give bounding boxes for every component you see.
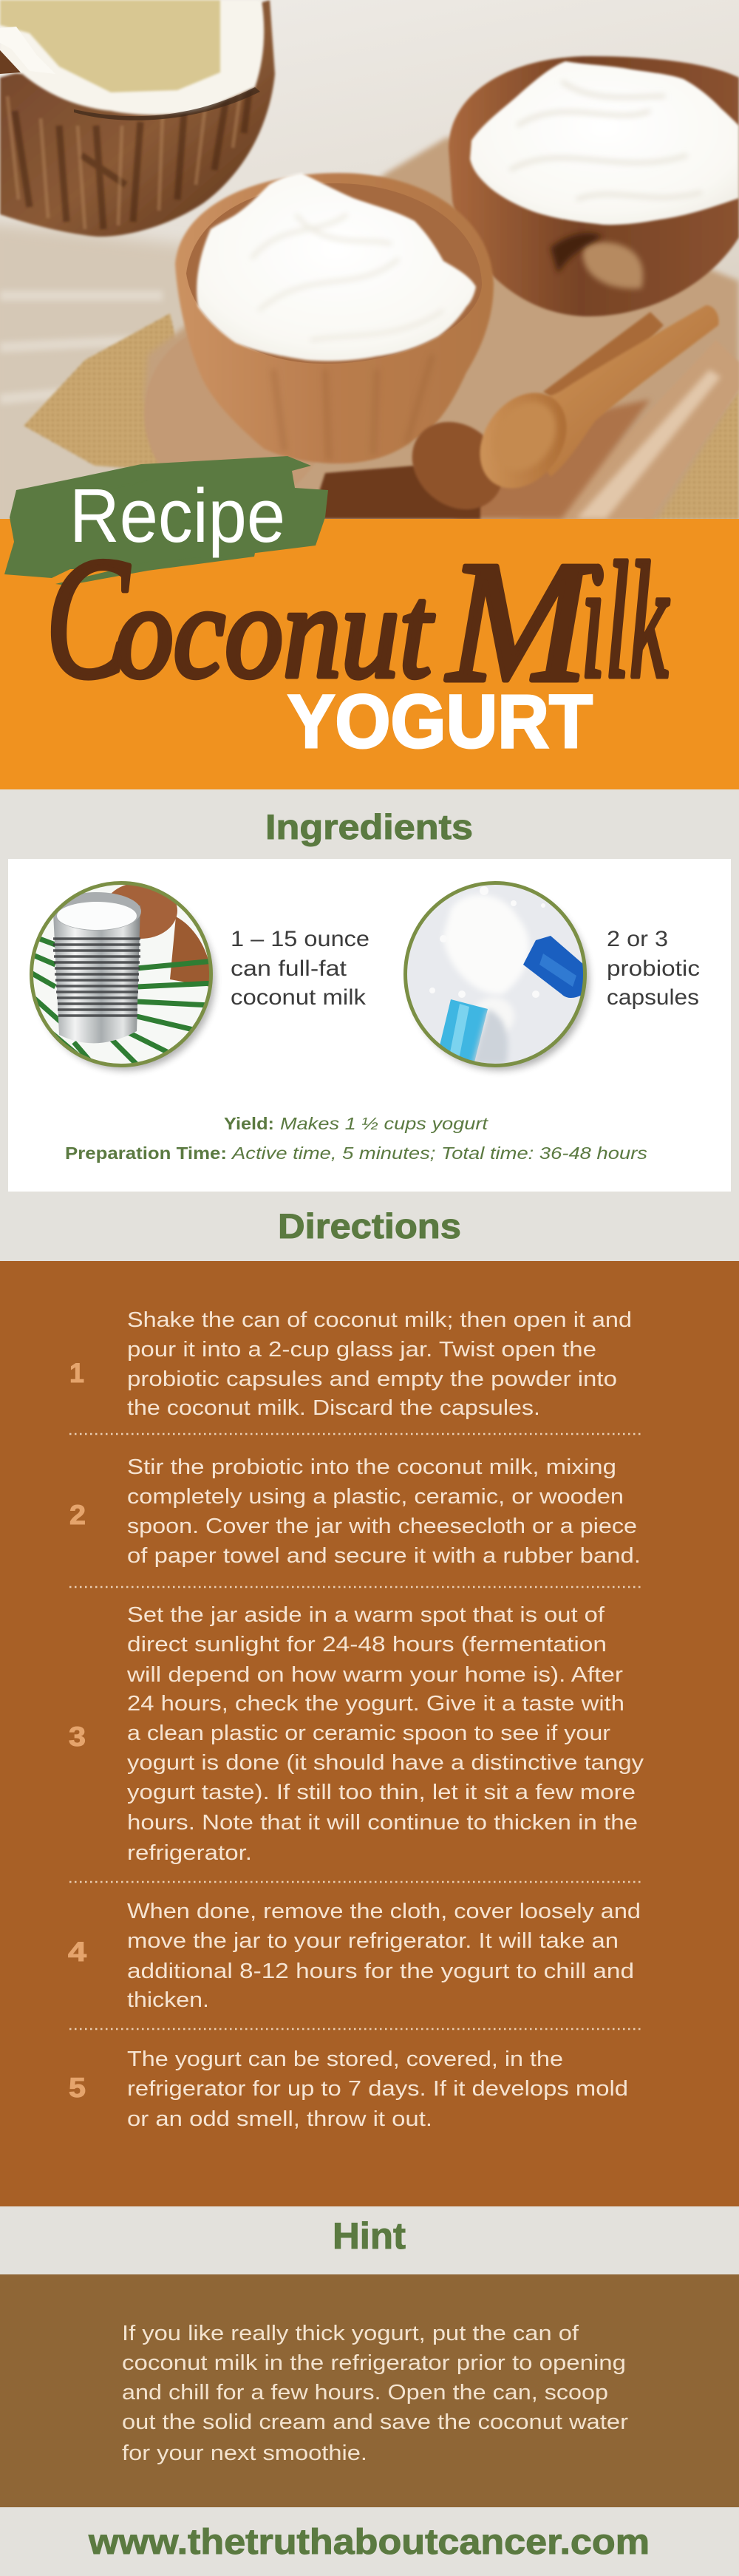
burlap left (24, 313, 176, 469)
wooden tray (144, 137, 739, 519)
icon: coconut milk can photo (30, 880, 215, 1072)
text: hint body: and chill for a few hours. Open the can, scoop (122, 2381, 608, 2405)
text: probiotic ingredient: 2 or 3 (607, 927, 668, 951)
step 2 (69, 1455, 641, 1568)
green brush stroke (4, 456, 328, 585)
title: Coconut Milk: C (46, 522, 130, 714)
text: coconut milk ingredient: coconut milk (231, 985, 367, 1010)
orange title band (0, 519, 739, 789)
coconut flesh (0, 0, 264, 115)
text: preparation time (65, 1143, 648, 1163)
text: coconut milk ingredient: can full-fat (231, 956, 347, 981)
step 1 (69, 1308, 632, 1420)
title: Coconut Milk: oconut (115, 558, 434, 705)
step 5 (69, 2047, 628, 2131)
panel: ingredients (8, 859, 731, 1192)
text: hint body: out the solid cream and save the coconut water (122, 2410, 628, 2434)
burlap right (643, 390, 739, 519)
step 3: 3 (69, 1722, 86, 1752)
panel: directions (0, 1261, 739, 2206)
text: preparation time: Active time, 5 minutes; Total time: 36-48 hours (231, 1143, 648, 1163)
step 1: 1 (69, 1358, 84, 1388)
step 3: direct sunlight for 24-48 hours (fermentation (127, 1633, 607, 1656)
text: probiotic ingredient (607, 927, 700, 1010)
title: YOGURT: YOGURT (287, 679, 593, 764)
step 5: 5 (69, 2073, 86, 2103)
step 3: yogurt is done (it should have a distinctive tangy (127, 1751, 644, 1775)
step 3: hours. Note that it will continue to thicken in the (127, 1811, 638, 1835)
step 4: thicken. (127, 1988, 209, 2012)
icon: probiotic capsules photo (404, 882, 589, 1070)
step 2: of paper towel and secure it with a rubber band. (127, 1544, 641, 1568)
coconut shell (0, 0, 275, 237)
step 5: The yogurt can be stored, covered, in the (127, 2047, 563, 2071)
front bowl yogurt (197, 173, 476, 361)
step 4: additional 8-12 hours for the yogurt to chill and (127, 1960, 634, 1983)
text: probiotic ingredient: probiotic (607, 956, 700, 981)
text: probiotic ingredient: capsules (607, 985, 699, 1010)
panel: hint (0, 2274, 739, 2507)
footer: website: www.thetruthaboutcancer.com (88, 2523, 650, 2562)
text: preparation time: Preparation Time: (65, 1143, 227, 1163)
step 3: refrigerator. (127, 1841, 252, 1865)
heading: Ingredients: Ingredients (265, 807, 473, 846)
step 1: Shake the can of coconut milk; then open it and (127, 1308, 632, 1332)
back bowl (449, 56, 739, 316)
text: yield: Makes 1 ½ cups yogurt (280, 1114, 489, 1133)
step 1: probiotic capsules and empty the powder into (127, 1367, 617, 1391)
step 5: refrigerator for up to 7 days. If it develops mold (127, 2077, 628, 2101)
step 2: spoon. Cover the jar with cheesecloth or a piece (127, 1515, 637, 1538)
step 2: completely using a plastic, ceramic, or wooden (127, 1485, 624, 1509)
text: hint body: If you like really thick yogurt, put the can of (122, 2322, 579, 2345)
step 3 (69, 1603, 644, 1865)
step 3: 24 hours, check the yogurt. Give it a taste with (127, 1692, 624, 1716)
title: Coconut Milk: M (446, 526, 596, 718)
step 2: 2 (69, 1500, 86, 1530)
step 4 (68, 1900, 641, 2012)
step 3: Set the jar aside in a warm spot that is out of (127, 1603, 605, 1627)
big spoon (479, 305, 720, 489)
step 5: or an odd smell, throw it out. (127, 2107, 432, 2131)
step 2: Stir the probiotic into the coconut milk, mixing (127, 1455, 616, 1479)
text: hint body (122, 2322, 628, 2465)
text: yield: Yield: (224, 1114, 274, 1133)
text: hint body: for your next smoothie. (122, 2441, 367, 2465)
title block (4, 456, 670, 764)
text: coconut milk ingredient (231, 927, 370, 1010)
text: coconut milk ingredient: 1 – 15 ounce (231, 927, 370, 951)
title: Coconut Milk (46, 522, 670, 718)
step 1: the coconut milk. Discard the capsules. (127, 1396, 540, 1420)
step 4: When done, remove the cloth, cover loosely and (127, 1900, 641, 1923)
heading: Directions: Directions (278, 1206, 461, 1245)
step 3: yogurt taste). If still too thin, let it sit a few more (127, 1781, 636, 1804)
front bowl (175, 173, 494, 463)
step 3: a clean plastic or ceramic spoon to see if your (127, 1722, 610, 1745)
text: hint body: coconut milk in the refrigerator prior to opening (122, 2351, 626, 2375)
small spoon (395, 312, 664, 528)
step 4: 4 (68, 1937, 87, 1967)
text: yield (224, 1114, 489, 1133)
hero photo: yogurt bowls and coconut (0, 0, 739, 532)
step 4: move the jar to your refrigerator. It will take an (127, 1929, 619, 1953)
step 1: pour it into a 2-cup glass jar. Twist open the (127, 1338, 596, 1362)
heading: Hint: Hint (333, 2215, 406, 2257)
step 3: will depend on how warm your home is). After (126, 1663, 623, 1687)
back bowl yogurt (470, 61, 739, 225)
plate (145, 339, 311, 483)
title: Recipe: Recipe (69, 473, 285, 558)
